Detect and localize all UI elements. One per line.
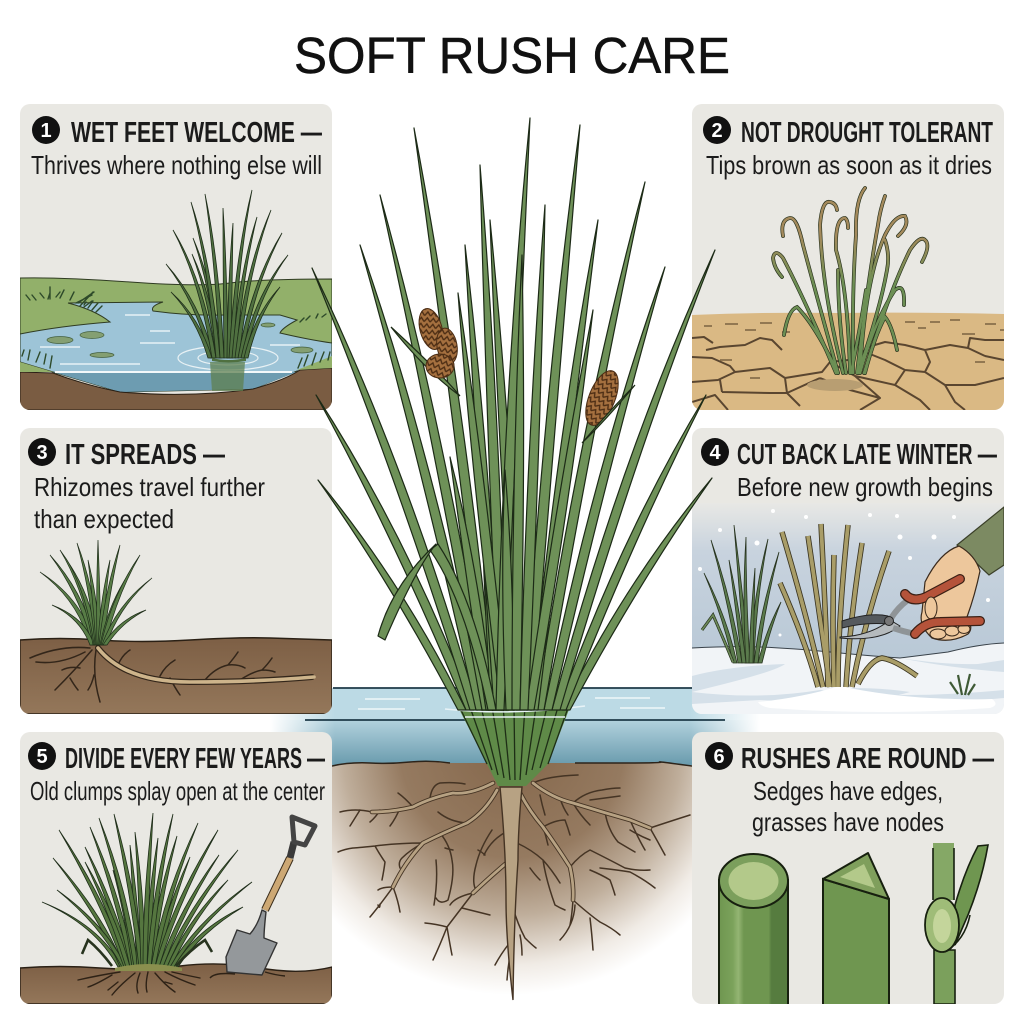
main roots <box>372 783 650 900</box>
heading 5: DIVIDE EVERY FEW YEARS — <box>65 743 325 775</box>
soil bank <box>20 368 332 410</box>
number badge 3: 3 <box>36 442 48 464</box>
pond <box>20 302 332 392</box>
clump <box>166 190 288 358</box>
central soil <box>332 761 692 1000</box>
central plant: right seed head and bract <box>579 366 635 443</box>
roots <box>78 972 200 995</box>
soil <box>20 638 332 714</box>
subtext 1: Thrives where nothing else will <box>31 150 322 180</box>
panel 6: rushes are round <box>692 732 1004 1006</box>
heading 3: IT SPREADS — <box>65 439 225 471</box>
number badge 3 <box>28 438 56 466</box>
clump <box>42 813 252 967</box>
cracked ground <box>692 313 1004 410</box>
ripples <box>178 346 278 370</box>
soil <box>20 964 332 1004</box>
number badge 6 <box>705 742 733 770</box>
subtext 6: Sedges have edges, <box>753 776 943 806</box>
subtext 3 <box>34 472 265 534</box>
central roots <box>338 775 690 980</box>
panel 4: cut back late winter <box>692 428 1004 714</box>
cut stalks <box>780 524 917 687</box>
central taproot <box>500 787 522 1000</box>
panel 1: wet feet welcome <box>20 104 332 410</box>
heading 1: WET FEET WELCOME — <box>71 117 322 149</box>
panel 5: divide every few years <box>20 732 332 1004</box>
drying clump <box>773 188 927 373</box>
subtext 5: Old clumps splay open at the center <box>30 776 325 806</box>
rhizome roots <box>30 647 275 702</box>
icon: pruners and hand <box>840 507 1004 640</box>
central water band <box>270 688 760 766</box>
number badge 4: 4 <box>709 442 721 464</box>
number badge 2 <box>703 116 731 144</box>
icon: spade <box>226 817 315 975</box>
icon: grass stem with node <box>925 843 988 1004</box>
lily pads <box>47 323 313 358</box>
number badge 4 <box>701 438 729 466</box>
number badge 5 <box>28 742 56 770</box>
title: SOFT RUSH CARE <box>294 27 730 84</box>
central plant: left seed head and bract <box>391 306 460 396</box>
clump <box>40 540 152 645</box>
snowflakes <box>698 509 990 636</box>
small sprout <box>950 674 975 695</box>
submerged stems <box>445 706 585 786</box>
fine rootlets <box>338 775 690 980</box>
submerged reflection <box>210 362 245 391</box>
meadow <box>20 277 332 342</box>
central plant: rush blades <box>312 118 715 710</box>
number badge 1: 1 <box>40 120 52 142</box>
snow <box>692 643 1004 714</box>
bank grasses <box>22 287 330 368</box>
subtext 6 <box>752 776 944 837</box>
subtext 6: grasses have nodes <box>752 807 944 837</box>
icon: round rush stem <box>719 854 788 1006</box>
number badge 6: 6 <box>713 746 725 768</box>
number badge 1 <box>32 116 60 144</box>
subtext 3: than expected <box>34 504 174 534</box>
subtext 3: Rhizomes travel further <box>34 472 265 502</box>
icon: triangular sedge stem <box>823 853 889 1006</box>
panel 2: not drought tolerant <box>692 104 1004 410</box>
green clump <box>704 525 781 663</box>
number badge 5: 5 <box>36 746 48 768</box>
panel 3: it spreads <box>20 428 332 714</box>
number badge 2: 2 <box>711 120 723 142</box>
